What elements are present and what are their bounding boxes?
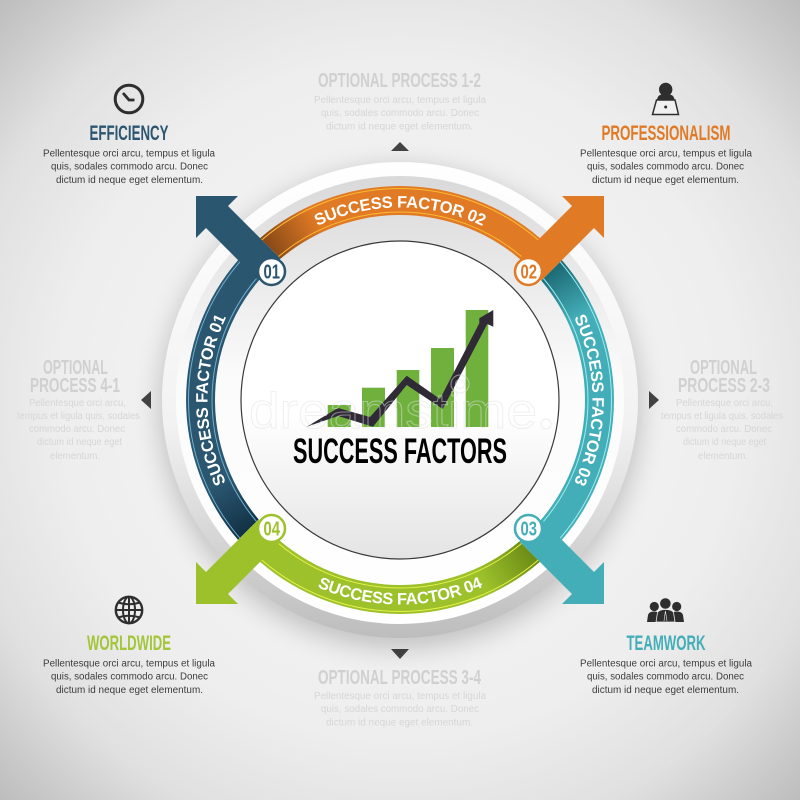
outer ring [162,162,638,638]
icon: person at laptop [652,83,678,114]
text: optional process 2-3 description: elementum. [698,451,748,462]
text: optional process 3-4 description: quis, sodales commodo arcu. Donec [321,704,479,715]
panel: efficiency [43,85,215,186]
number badge 04 [258,515,285,542]
number badge 03 [515,515,542,542]
text: optional process 3-4 description: dictum id neque eget elementum. [326,718,473,728]
panel: worldwide [43,597,215,696]
heading: optional process 4-1: PROCESS 4-1 [30,375,120,397]
text: optional process 1-2 description: Pellentesque orci arcu, tempus et ligula [314,95,486,106]
text: professionalism description: Pellentesque orci arcu, tempus et ligula [580,148,752,160]
bottom process: optional process 3-4 [314,649,486,728]
text: optional process 3-4 description [314,691,486,728]
band and arrow: success factor 02 [260,186,604,281]
text: optional process 1-2 description: dictum id neque eget elementum. [326,122,473,132]
curved label: success factor 04: SUCCESS FACTOR 04 [318,577,482,604]
text: teamwork description: Pellentesque orci arcu, tempus et ligula [580,658,752,670]
heading: worldwide: WORLDWIDE [87,632,171,655]
ring shadow [160,168,640,648]
band and arrow: success factor 01 [186,196,281,540]
text: optional process 3-4 description: Pellentesque orci arcu, tempus et ligula [314,691,486,702]
text: optional process 4-1 description: commodo arcu. Donec [29,424,125,435]
bars [328,310,488,427]
text: professionalism description: dictum id neque eget elementum. [592,175,739,186]
heading: optional process 4-1: OPTIONAL [43,357,108,379]
arrow: up triangle [391,142,409,151]
text: worldwide description: quis, sodales commodo arcu. Donec [51,672,208,682]
number badge 01 [258,258,285,285]
text: professionalism description [580,148,752,186]
text: efficiency description: Pellentesque orci arcu, tempus et ligula [43,148,215,160]
arrow: left triangle [141,391,151,409]
text: teamwork description: dictum id neque eget elementum. [592,685,739,696]
heading: optional process 2-3 [678,357,770,397]
arrow: down triangle [391,649,409,659]
text: optional process 2-3 description: tempus et ligula quis, sodales [661,411,783,422]
curved label: success factor 02: SUCCESS FACTOR 02 [314,196,486,226]
curved label: success factor 03: SUCCESS FACTOR 03 [575,314,604,486]
text: worldwide description: dictum id neque eget elementum. [56,685,203,696]
text: optional process 2-3 description: commodo arcu. Donec [676,424,772,435]
right process: optional process 2-3 [649,357,783,462]
text: efficiency description: quis, sodales commodo arcu. Donec [51,162,208,172]
heading: professionalism: PROFESSIONALISM [602,122,730,145]
text: teamwork description [580,658,752,696]
heading: teamwork: TEAMWORK [626,632,706,655]
curved label: success factor 01: SUCCESS FACTOR 01 [196,315,226,486]
watermark: dreamstime [249,383,537,439]
number badge 01: 01 [264,262,280,284]
heading: optional process 3-4: OPTIONAL PROCESS 3-4 [318,667,482,689]
inner circle [241,241,559,559]
text: optional process 2-3 description: dictum id neque eget [683,437,766,448]
left process: optional process 4-1 [17,357,151,462]
number badge 02: 02 [520,262,537,284]
main title: SUCCESS FACTORS [293,432,507,471]
number badge 03: 03 [520,518,537,540]
rising arrow [307,310,493,427]
icon: clock [115,85,143,113]
text: efficiency description: dictum id neque eget elementum. [56,175,203,186]
middle ring [176,176,624,624]
heading: optional process 2-3: OPTIONAL [690,357,757,379]
icon: team of people [647,598,684,622]
arrow: right triangle [649,391,659,409]
text: optional process 2-3 description: Pellentesque orci arcu, [676,398,773,409]
heading: optional process 4-1 [30,357,120,397]
heading: efficiency: EFFICIENCY [90,122,168,145]
top process: optional process 1-2 [314,70,486,151]
heading: optional process 1-2: OPTIONAL PROCESS 1-2 [318,70,481,92]
text: optional process 2-3 description [661,398,783,462]
band and arrow: success factor 04 [196,519,540,614]
text: optional process 4-1 description [17,398,140,462]
panel: teamwork [580,598,752,696]
text: professionalism description: quis, sodales commodo arcu. Donec [587,162,744,172]
text: worldwide description [43,658,215,696]
wheel diagram [148,156,652,660]
text: worldwide description: Pellentesque orci arcu, tempus et ligula [43,658,215,670]
text: efficiency description [43,148,215,186]
bar chart with rising arrow [307,310,493,427]
text: optional process 1-2 description [314,95,486,132]
number badge 02 [515,258,542,285]
text: optional process 4-1 description: Pellentesque orci arcu, [29,398,126,409]
text: optional process 4-1 description: elementum. [50,451,100,462]
icon: globe [116,597,142,623]
number badge 04: 04 [264,518,281,540]
text: teamwork description: quis, sodales commodo arcu. Donec [587,672,744,682]
panel: professionalism [580,83,752,186]
text: optional process 4-1 description: dictum id neque eget [37,437,122,448]
band and arrow: success factor 03 [519,260,614,604]
text: optional process 4-1 description: tempus et ligula quis, sodales [17,411,140,422]
text: optional process 1-2 description: quis, sodales commodo arcu. Donec [321,108,479,119]
